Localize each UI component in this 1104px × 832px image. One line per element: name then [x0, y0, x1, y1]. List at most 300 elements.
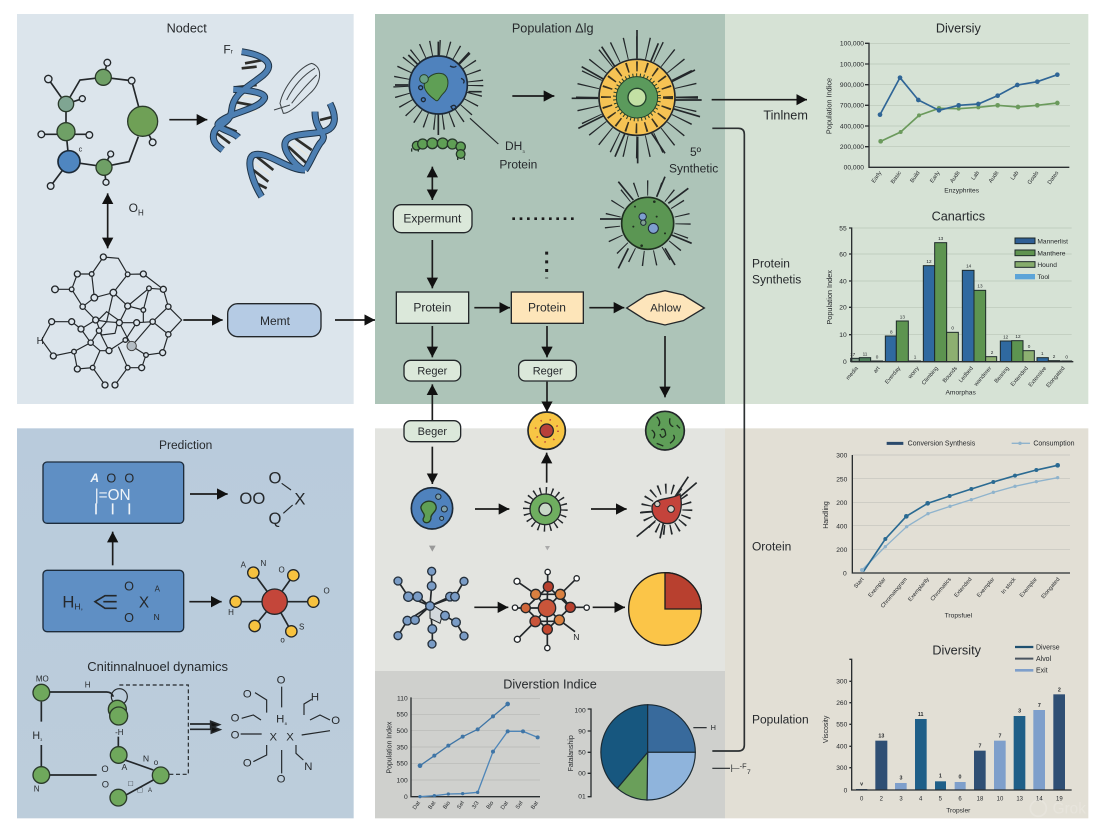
connector: long right elbow — [712, 128, 744, 751]
diagram: green atom loop: O — [102, 780, 109, 790]
bar chart: diversity: 7 — [979, 743, 982, 749]
bar chart: diversity: 300 — [836, 679, 848, 686]
line chart: diversion: Bio — [486, 800, 495, 811]
bar chart: canartics: Population Index — [825, 270, 834, 325]
box: Beger: Beger — [418, 426, 447, 438]
structure: OO X O: X — [294, 489, 306, 508]
arrow — [474, 605, 508, 610]
bar chart: canartics: Bearing — [994, 366, 1011, 385]
label: Population: Population — [752, 712, 809, 726]
heading: Diversion Indice: Diverstion Indice — [503, 678, 597, 692]
bar chart: canartics: Extensive — [1028, 366, 1048, 388]
callout: H-F label: -F — [740, 761, 747, 770]
bar chart: canartics: Everday — [884, 366, 902, 386]
diagram: ring molecule — [38, 59, 158, 189]
bar chart: canartics: 13 — [938, 236, 944, 241]
label: Orotein: Orotein — [752, 540, 791, 554]
bar chart: diversity: 19 — [1056, 796, 1063, 802]
diagram: green atom loop: A — [121, 762, 127, 772]
line chart: diversion: Bat — [428, 800, 438, 811]
box: Beger — [404, 421, 461, 442]
box: Reger middle — [519, 360, 576, 381]
structure: branched X-X: O — [243, 758, 252, 770]
box: reaction: H, — [74, 601, 83, 611]
line chart: diversity: Goals — [1027, 170, 1040, 186]
bar chart: diversity: 400 — [836, 744, 848, 751]
line chart: diversion: Dat — [412, 800, 422, 811]
heading: Population: Population Δlg — [512, 21, 593, 35]
diagram: polycyclic network: H — [37, 336, 44, 347]
legend: bar series: Alvol — [1036, 656, 1052, 663]
bar chart: diversity: 18 — [977, 796, 984, 802]
arrow — [190, 491, 228, 496]
line chart: diversion: 350 — [397, 744, 408, 751]
box: Memt: Memt — [260, 314, 291, 328]
panel: top right charts — [725, 14, 1088, 404]
heading: Prediction: Prediction — [159, 438, 212, 452]
structure: branched X-X: H — [276, 714, 284, 726]
callout: H-F label — [712, 761, 751, 776]
diagram: green atom loop: O — [101, 764, 109, 774]
line chart: diversion: 550 — [397, 712, 408, 719]
line chart: diversity: 900,000 — [840, 82, 864, 89]
line chart: synthesis growth: Tropsfuel — [945, 613, 973, 620]
bar chart: diversity: 0 — [844, 787, 848, 794]
bar chart: canartics: 20 — [839, 305, 847, 312]
line chart: synthesis growth: Exemplar — [868, 577, 888, 599]
diagram: green atom loop: N — [143, 753, 149, 763]
bar chart: canartics: Elongated — [1046, 366, 1067, 389]
bar chart: diversity: 3 — [899, 796, 903, 802]
box: Reger middle: Reger — [533, 365, 563, 377]
line chart: synthesis growth: Chromatics — [930, 577, 953, 603]
line chart: synthesis growth: Start — [853, 576, 866, 590]
line chart: diversion: Bio — [442, 800, 452, 811]
dotted connector — [542, 252, 551, 278]
line chart: synthesis growth: In stock — [1000, 577, 1018, 596]
watermark — [1030, 800, 1086, 818]
legend: bar chart series: Manthere — [1037, 250, 1066, 257]
line chart: diversity — [824, 41, 1070, 195]
callout: H-F label: ⊢ — [730, 763, 740, 775]
heading: conditional dynamics: Cnitinnalnuoel dynamics — [87, 659, 229, 674]
icon: blue spiky cell — [395, 42, 482, 135]
label: Protein Synthesis — [752, 257, 801, 286]
arrow — [475, 506, 509, 511]
line chart: diversity: Lab — [1010, 170, 1020, 182]
label: DH Protein: DH — [505, 139, 522, 153]
panel: bottom centre — [375, 382, 725, 818]
bar chart: canartics: 0 — [1065, 355, 1068, 360]
bar chart: canartics: worry — [907, 366, 921, 381]
legend: bar series — [1015, 644, 1060, 675]
legend: line chart series: Conversion Synthesis — [908, 441, 976, 448]
legend: bar series: Diverse — [1036, 644, 1060, 651]
structure: branched X-X — [231, 674, 340, 786]
bar chart: diversity: 5 — [939, 796, 943, 802]
box: reaction: A — [155, 585, 161, 594]
line chart: synthesis growth: 300 — [836, 453, 848, 460]
box: reaction: O — [124, 611, 134, 625]
bar chart: diversity: 13 — [1016, 796, 1024, 802]
diagram: green atom loop: -H — [115, 728, 124, 737]
bar chart: diversity: 13 — [878, 733, 884, 739]
box: formula: |=ON — [95, 487, 131, 504]
line chart: diversion: 550 — [397, 761, 408, 768]
line chart: diversion: 100 — [397, 777, 408, 784]
pie chart: diversity: 100 — [575, 707, 586, 714]
panel: bottom right charts — [725, 428, 1088, 818]
line chart: synthesis growth: Exemplar — [976, 577, 996, 599]
structure: branched X-X: O — [277, 774, 286, 786]
label: DH Protein — [499, 139, 537, 171]
bar chart: diversity: 10 — [997, 796, 1004, 802]
box: formula — [43, 462, 184, 523]
diagram: star molecule: H — [228, 608, 234, 617]
icon: yellow cell — [528, 412, 565, 449]
bar chart: diversity: 14 — [1036, 796, 1043, 802]
bar chart: canartics: 0 — [951, 326, 954, 331]
diagram: star molecule: O — [324, 586, 330, 595]
arrow — [430, 240, 435, 288]
label: F subscript: Fr — [223, 42, 234, 56]
arrow — [544, 453, 549, 483]
box: Reger left — [404, 360, 461, 381]
bar chart: canartics: 2 — [1053, 354, 1056, 359]
label: DH Protein: ₃ — [522, 148, 525, 155]
diagram: star molecule: O — [279, 566, 285, 575]
bar chart: canartics: wanderer — [973, 366, 993, 388]
bar chart: diversity: 2 — [880, 796, 884, 802]
bar chart: canartics: 0 — [843, 359, 847, 366]
label: Tinlnem: Tinlnem — [763, 108, 808, 122]
legend: bar series: Exit — [1036, 668, 1048, 675]
box: Reger left: Reger — [417, 365, 448, 377]
bar chart: canartics: Extended — [1010, 366, 1030, 388]
box: reaction: X — [139, 594, 149, 611]
pie chart: diversity: 90 — [578, 728, 586, 735]
line chart: diversion: 0 — [404, 794, 408, 801]
label: Synthetic — [669, 145, 718, 175]
bar chart: diversity: Tropsler — [946, 807, 971, 814]
icon: green spiky cell — [527, 491, 563, 527]
line chart: synthesis growth — [823, 441, 1075, 620]
structure: branched X-X: O — [331, 715, 340, 727]
box: reaction — [43, 570, 184, 632]
icon: red spiky cell — [637, 477, 697, 538]
decision: Ahlow: Ahlow — [650, 303, 682, 315]
line chart: diversion: 3/3 — [471, 800, 481, 810]
line chart: diversity: Build — [910, 170, 922, 184]
box: Protein: Protein — [413, 301, 451, 315]
line chart: diversity: Audit — [988, 170, 1001, 184]
icon: yellow ringed cell — [572, 30, 702, 163]
bar chart: canartics: Climbing — [921, 366, 940, 386]
box: formula: A — [89, 471, 99, 485]
bar chart: canartics: 1 — [1041, 351, 1044, 356]
line chart: synthesis growth: 200 — [836, 547, 848, 554]
box: Experiment: Expermunt — [403, 212, 462, 226]
structure: branched X-X: X — [270, 732, 278, 744]
heading: Diversity: Diversity — [932, 644, 982, 658]
pie chart: diversity: Fatalanship — [568, 735, 575, 771]
structure: OO X O: Q — [269, 509, 282, 528]
panel: top left molecules — [17, 14, 375, 404]
structure: branched X-X: N — [304, 761, 312, 773]
bar chart: canartics: 12 — [1003, 334, 1009, 339]
line chart: diversity: 00,000 — [844, 165, 864, 172]
bar chart: canartics: 40 — [839, 278, 847, 285]
heading: Diversity: Diversiy — [936, 22, 981, 36]
pie chart: diversity: 00 — [578, 771, 586, 778]
bar chart: diversity: 0 — [860, 796, 864, 802]
bar chart: canartics: 13 — [900, 314, 905, 319]
line chart: synthesis growth: Extended — [954, 577, 974, 599]
bar chart: canartics: 12 — [926, 259, 932, 264]
line chart: synthesis growth: Chromatogram — [880, 577, 909, 610]
bar chart: canartics: 14 — [966, 264, 972, 269]
label: DH Protein: Protein — [499, 157, 537, 171]
bar chart: diversity — [823, 659, 1072, 814]
legend: bar chart series: Tool — [1037, 274, 1050, 281]
line chart: synthesis growth: Elongated — [1041, 577, 1062, 600]
diagram: star molecule: A — [241, 561, 247, 570]
line chart: diversity: Audit — [949, 170, 962, 184]
marker: grey triangle — [429, 546, 436, 552]
bar chart: canartics: art — [873, 365, 882, 375]
line chart: diversion — [387, 696, 540, 811]
icon: green spiky cell — [600, 177, 692, 268]
pie chart: diversity — [568, 705, 695, 800]
diagram: polycyclic network — [37, 254, 182, 388]
line chart: diversity: Early — [871, 170, 883, 184]
pie chart: diversity: 50 — [578, 750, 586, 757]
label: Synthetic: 5º — [690, 145, 702, 159]
bar chart: canartics — [825, 225, 1073, 397]
line chart: diversity: Dates — [1047, 170, 1060, 186]
line chart: diversity: 100,000 — [840, 61, 864, 68]
bar chart: diversity: 7 — [999, 733, 1002, 739]
panel: diversion indices — [375, 671, 725, 818]
line chart: diversity: Early — [929, 170, 942, 184]
arrow — [430, 447, 435, 484]
bar chart: diversity: 7 — [1038, 703, 1041, 709]
label: H callout — [693, 723, 716, 732]
double arrow — [430, 167, 435, 200]
legend: bar chart series: Hound — [1037, 262, 1057, 269]
legend: line chart series — [887, 441, 1075, 448]
arrow — [183, 317, 223, 322]
arrow: Beger up to Reger — [430, 384, 435, 420]
heading: Nodect: Nodect — [167, 21, 207, 35]
diagram: green atom loop: A — [148, 788, 152, 794]
box: Memt — [228, 304, 321, 337]
line chart: synthesis growth: Exemplarily — [907, 577, 931, 603]
icon: green chain — [412, 138, 465, 160]
line chart: synthesis growth: 0 — [843, 571, 847, 578]
box: formula: O — [106, 472, 116, 486]
diagram: green atom loop: H — [85, 681, 91, 690]
bar chart: canartics: Amorphas — [945, 390, 977, 397]
line chart: diversion: 500 — [397, 728, 408, 735]
structure: branched X-X: O — [231, 729, 240, 741]
pie chart: yellow red — [629, 573, 701, 645]
panel: top centre population — [375, 14, 725, 404]
arrow — [430, 326, 435, 357]
legend: bar chart series: Mannerlist — [1037, 238, 1068, 245]
diagram: red network — [512, 569, 589, 651]
box: Protein — [396, 292, 469, 323]
label: OH: O — [129, 201, 138, 215]
structure: OO X O: OO — [239, 489, 265, 508]
legend: line chart series: Consumption — [1033, 441, 1075, 448]
diagram: green atom loop: □ — [138, 786, 143, 795]
diagram: green atom loop: N — [34, 785, 40, 794]
bar chart: diversity: 2 — [1058, 687, 1061, 693]
line chart: diversion: Bat — [530, 800, 540, 811]
structure: branched X-X: ₈ — [284, 719, 287, 726]
arrows: double — [190, 721, 220, 733]
line chart: synthesis growth: 250 — [836, 476, 848, 483]
arrow — [512, 93, 554, 98]
arrow — [593, 605, 625, 610]
bar chart: diversity: 3 — [900, 776, 903, 782]
diagram: blue network — [394, 567, 468, 648]
line chart: diversion: Sel — [515, 800, 525, 811]
line chart: synthesis growth: 400 — [836, 523, 848, 530]
bar chart: canartics: media — [845, 365, 860, 381]
bar chart: canartics: Ledbed — [958, 366, 975, 384]
structure: branched X-X: O — [231, 712, 240, 724]
line chart: diversity: Population Indice — [824, 78, 833, 134]
marker: grey triangle — [545, 546, 550, 550]
label: OH: H — [138, 208, 144, 217]
line chart: diversion: 110 — [397, 696, 408, 703]
callout: H-F label: 7 — [747, 769, 751, 776]
dotted connector — [512, 215, 578, 223]
line chart: diversity: 200,000 — [840, 144, 864, 151]
bar chart: canartics: 17 — [850, 352, 856, 357]
structure: branched X-X: X — [286, 732, 294, 744]
connector: to Tinlnem arrow — [712, 97, 807, 102]
line chart: synthesis growth: Handling — [823, 501, 830, 529]
box: reaction: N — [154, 612, 160, 622]
diagram: green atom loop — [32, 675, 188, 806]
arrow — [662, 336, 667, 397]
legend: bar chart series — [1015, 238, 1068, 281]
decision: Ahlow — [627, 291, 704, 325]
bar chart: diversity: 11 — [918, 712, 924, 718]
diagram: green atom loop: ₃ — [40, 737, 43, 743]
structure: branched X-X: O — [243, 688, 252, 700]
box: reaction: H — [62, 592, 74, 611]
line chart: diversion: Dat — [500, 800, 510, 811]
heading: Canartics: Canartics — [932, 209, 985, 223]
box: reaction: O — [124, 580, 134, 594]
box: Experiment — [393, 205, 472, 233]
bar chart: diversity: 4 — [919, 796, 923, 802]
diagram: green atom loop: □ — [128, 779, 133, 788]
bar chart: canartics: 0 — [1028, 344, 1031, 349]
line chart: diversity: Basic — [890, 170, 903, 185]
callout line — [470, 118, 498, 144]
box: formula: O — [124, 472, 134, 486]
arrow — [474, 305, 510, 310]
arrow — [169, 117, 207, 122]
bar chart: diversity: 1 — [939, 774, 942, 780]
arrow — [110, 532, 115, 565]
structure: branched X-X: H — [311, 692, 319, 704]
label: Protein Synthesis: Protein — [752, 257, 790, 271]
line chart: diversion: Sel — [456, 800, 466, 811]
box: Protein highlighted — [511, 292, 583, 323]
diagram: green atom loop: H — [32, 730, 40, 742]
label: H callout: H — [711, 723, 716, 732]
bar chart: diversity: 260 — [836, 700, 848, 707]
structure: OO X O: O — [269, 468, 282, 487]
bar chart: diversity: 300 — [836, 765, 848, 772]
diagram: green atom loop: MO — [36, 675, 49, 684]
bar chart: canartics: 8 — [890, 329, 893, 334]
panel: bottom left prediction — [17, 428, 354, 818]
diagram: red network: N — [573, 632, 579, 642]
bar chart: diversity: v — [860, 781, 863, 787]
bar chart: diversity: 3 — [1018, 709, 1021, 715]
bar chart: canartics: 55 — [839, 225, 847, 232]
box: Protein highlighted: Protein — [528, 301, 566, 315]
structure: OO X O — [239, 468, 306, 528]
icon: green textured cell — [646, 411, 684, 450]
watermark: Grok — [1053, 801, 1086, 818]
line chart: diversion: Population Index — [387, 721, 394, 774]
diagram: star molecule — [228, 559, 330, 645]
bar chart: canartics: 12 — [1015, 334, 1021, 339]
arrow — [189, 599, 222, 604]
diagram: DNA helices — [213, 52, 334, 197]
line chart: synthesis growth: Exemplar — [1019, 577, 1039, 599]
bar chart: diversity: 6 — [958, 796, 962, 802]
label: Protein Synthesis: Synthetis — [752, 272, 801, 286]
diagram: green atom loop: o — [154, 758, 159, 767]
line chart: diversity: 700,000 — [840, 103, 864, 110]
line chart: diversity: Lab — [971, 170, 981, 182]
arrow — [591, 506, 627, 511]
bar chart: canartics: 1 — [914, 355, 917, 360]
bar chart: canartics: 10 — [839, 332, 847, 339]
line chart: diversity: 400,000 — [840, 123, 864, 130]
bar chart: canartics: Bounds — [942, 366, 959, 384]
arrow: Reger down to yellow cell — [544, 382, 549, 412]
line chart: synthesis growth: 200 — [836, 500, 848, 507]
label: Synthetic: Synthetic — [669, 161, 718, 175]
pie chart: diversity: 01 — [578, 793, 586, 800]
bar chart: canartics: 11 — [863, 351, 868, 356]
diagram: star molecule: N — [260, 559, 266, 568]
line chart: diversity: 100,000 — [840, 41, 864, 48]
structure: branched X-X: O — [277, 674, 286, 686]
diagram: ring molecule: c — [79, 144, 83, 153]
bar chart: diversity: 550 — [836, 722, 848, 729]
arrow — [589, 305, 624, 310]
bar chart: diversity: Viscosity — [823, 715, 830, 743]
diagram: star molecule: S — [299, 622, 304, 631]
bar chart: canartics: 60 — [839, 251, 847, 258]
bar chart: canartics: 0 — [876, 355, 879, 360]
arrow into central panel — [335, 317, 375, 322]
bar chart: canartics: 2 — [991, 350, 994, 355]
line chart: diversity: Enzyphrites — [944, 188, 980, 195]
icon: blue cell — [411, 488, 453, 529]
